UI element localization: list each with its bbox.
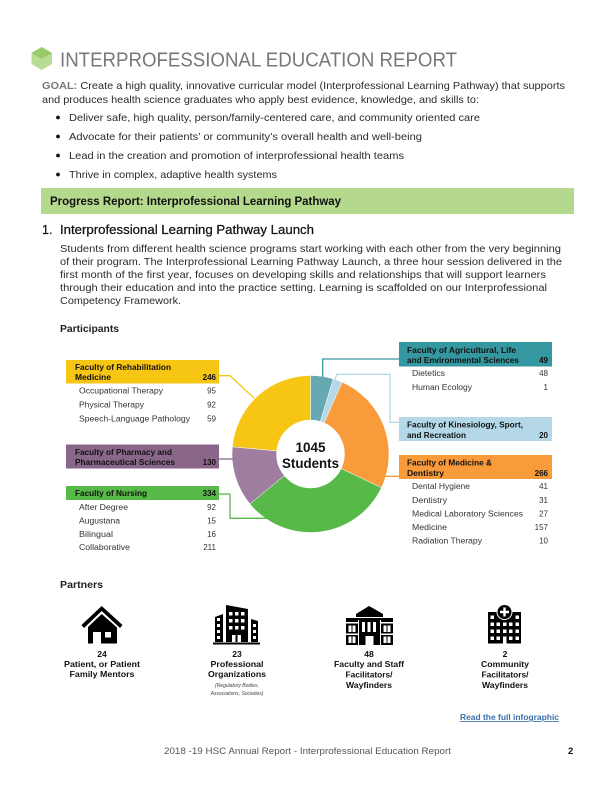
panel: rehabilitation medicine: 95 bbox=[207, 386, 217, 396]
panel: rehabilitation medicine: 246 bbox=[203, 373, 217, 382]
connector: nursing bbox=[219, 494, 267, 518]
panel: kinesiology: Faculty of Kinesiology, Sport, bbox=[407, 420, 523, 430]
goal text bbox=[42, 81, 565, 106]
panel: agricultural: Human Ecology bbox=[412, 383, 472, 392]
partner: community facilitators bbox=[481, 649, 529, 690]
panel: medicine: Dentistry bbox=[412, 496, 447, 505]
panel: kinesiology: 20 bbox=[539, 431, 549, 440]
panel: rehabilitation medicine: 92 bbox=[207, 400, 217, 410]
bullet list: Advocate for their patients’ or community’s overall health and well-being bbox=[69, 132, 422, 143]
panel: nursing: Collaborative bbox=[79, 543, 131, 552]
panel: medicine: Dentistry bbox=[407, 469, 445, 478]
section paragraph: first month of the first year, focuses on developing skills and relationships that will support learners bbox=[60, 270, 546, 281]
footer: 2018 -19 HSC Annual Report - Interprofessional Education Report bbox=[164, 746, 451, 756]
panel: rehabilitation medicine bbox=[66, 360, 219, 424]
participants heading: Participants bbox=[60, 323, 119, 335]
panel: rehabilitation medicine: Speech-Language Pathology bbox=[79, 414, 190, 424]
partner: patient mentors: 24 bbox=[97, 649, 107, 659]
panel: rehabilitation medicine: 59 bbox=[207, 414, 217, 424]
panel: medicine: Medicine bbox=[412, 523, 448, 532]
section heading: 1. bbox=[42, 223, 52, 237]
panel: kinesiology: and Recreation bbox=[407, 431, 466, 440]
partner: patient mentors bbox=[64, 649, 140, 679]
panel: kinesiology bbox=[399, 417, 552, 441]
donut chart bbox=[232, 376, 389, 533]
icon: office buildings bbox=[213, 605, 260, 644]
panel: agricultural bbox=[399, 342, 552, 392]
partner: community facilitators: 2 bbox=[503, 649, 508, 659]
partner: community facilitators: Wayfinders bbox=[482, 680, 528, 690]
panel: nursing: Augustana bbox=[79, 516, 121, 526]
partner: patient mentors: Patient, or Patient bbox=[64, 659, 140, 669]
bullet list: Thrive in complex, adaptive health systems bbox=[69, 170, 277, 181]
partner: faculty and staff bbox=[334, 649, 404, 690]
connector: medicine bbox=[381, 475, 399, 477]
bullet list: Deliver safe, high quality, person/family-centered care, and community oriented care bbox=[69, 113, 480, 124]
panel: nursing: Faculty of Nursing bbox=[75, 489, 147, 498]
connector: rehabilitation bbox=[219, 376, 254, 398]
connector: agricultural bbox=[323, 359, 399, 377]
panel: pharmacy: Pharmaceutical Sciences bbox=[75, 458, 176, 467]
donut centre total: 1045 bbox=[295, 440, 326, 455]
panel: nursing: 334 bbox=[203, 489, 217, 498]
panel: agricultural: 48 bbox=[539, 369, 549, 378]
partner: community facilitators: Community bbox=[481, 659, 529, 669]
panel: nursing: 15 bbox=[207, 516, 217, 526]
panel: agricultural: 49 bbox=[539, 356, 549, 365]
icon: green hexagon bbox=[32, 47, 52, 70]
partner: patient mentors: Family Mentors bbox=[70, 669, 135, 679]
section paragraph: of their program. The Interprofessional Learning Pathway Launch, a three hour session delivered in the bbox=[60, 257, 562, 268]
panel: agricultural: Faculty of Agricultural, Life bbox=[407, 346, 517, 355]
panel: medicine: Medical Laboratory Sciences bbox=[412, 510, 523, 518]
connector: pharmacy bbox=[219, 458, 233, 460]
panel: agricultural: Dietetics bbox=[412, 369, 445, 378]
panel: nursing: 16 bbox=[207, 530, 217, 539]
section paragraph: Students from different health science programs start working with each other from the very beginning bbox=[60, 244, 561, 255]
icon: university building bbox=[346, 606, 393, 645]
panel: medicine: 27 bbox=[539, 510, 549, 518]
panel: medicine: 31 bbox=[539, 496, 549, 505]
progress report band: Progress Report: Interprofessional Learning Pathway bbox=[50, 196, 342, 208]
panel: medicine: Dental Hygiene bbox=[412, 482, 471, 491]
panel: medicine: 10 bbox=[539, 536, 549, 546]
donut centre total: Students bbox=[282, 456, 339, 471]
bullet list: Lead in the creation and promotion of interprofessional health teams bbox=[69, 151, 404, 162]
icon: hospital bbox=[488, 604, 521, 644]
panel: medicine: 41 bbox=[539, 482, 549, 491]
panel: medicine: 266 bbox=[535, 469, 549, 478]
partner: professional organizations: Associations, Societies) bbox=[210, 691, 264, 697]
panel: rehabilitation medicine: Medicine bbox=[75, 373, 112, 382]
panel: medicine: Radiation Therapy bbox=[412, 536, 482, 546]
panel: nursing bbox=[66, 486, 219, 552]
partner: professional organizations: (Regulatory Bodies, bbox=[215, 683, 259, 689]
section paragraph bbox=[60, 244, 562, 307]
donut centre total bbox=[282, 440, 339, 471]
partner: faculty and staff: Faculty and Staff bbox=[334, 659, 404, 669]
panel: nursing: 211 bbox=[203, 543, 217, 552]
link: read the full infographic: Read the full infographic bbox=[460, 712, 559, 722]
partner: professional organizations bbox=[208, 649, 266, 697]
section paragraph: Competency Framework. bbox=[60, 296, 181, 307]
panel: rehabilitation medicine: Faculty of Rehabilitation bbox=[75, 363, 171, 372]
panel: nursing: 92 bbox=[207, 503, 217, 512]
panel: agricultural: and Environmental Sciences bbox=[407, 356, 520, 365]
page number: 2 bbox=[568, 746, 573, 757]
partner: community facilitators: Facilitators/ bbox=[482, 670, 529, 680]
partner: professional organizations: Professional bbox=[210, 659, 264, 669]
panel: nursing: Bilingual bbox=[79, 530, 113, 539]
panel: pharmacy bbox=[66, 444, 219, 468]
panel: nursing: After Degree bbox=[79, 503, 129, 512]
partner: professional organizations: Organizations bbox=[208, 669, 266, 679]
panel: medicine: 157 bbox=[535, 523, 549, 532]
goal text: GOAL: Create a high quality, innovative curricular model (Interprofessional Learning Pathway) that supports bbox=[42, 81, 565, 92]
partner: faculty and staff: 48 bbox=[364, 649, 374, 659]
panel: rehabilitation medicine: Occupational Therapy bbox=[79, 386, 163, 396]
partner: faculty and staff: Wayfinders bbox=[346, 680, 392, 690]
goal text: and produces health science graduates who apply best evidence, knowledge, and skills to: bbox=[42, 95, 479, 106]
panel: pharmacy: Faculty of Pharmacy and bbox=[75, 448, 172, 457]
partners heading: Partners bbox=[60, 579, 103, 591]
progress report band bbox=[41, 188, 574, 214]
bullet list bbox=[56, 113, 480, 181]
panel: agricultural: 1 bbox=[544, 383, 549, 392]
partner: professional organizations: 23 bbox=[232, 649, 242, 659]
icon: house bbox=[82, 606, 122, 644]
section paragraph: through their education and into the practice setting. Learning is scaffolded on our Interprofessional bbox=[60, 283, 547, 294]
panel: medicine: Faculty of Medicine & bbox=[407, 458, 492, 468]
panel: pharmacy: 130 bbox=[203, 458, 217, 467]
panel: medicine bbox=[399, 455, 552, 546]
connector: kinesiology bbox=[335, 374, 399, 422]
panel: rehabilitation medicine: Physical Therapy bbox=[79, 400, 144, 410]
title: INTERPROFESSIONAL EDUCATION REPORT bbox=[60, 50, 457, 72]
partner: faculty and staff: Facilitators/ bbox=[346, 670, 393, 680]
section heading: Interprofessional Learning Pathway Launch bbox=[60, 223, 314, 237]
